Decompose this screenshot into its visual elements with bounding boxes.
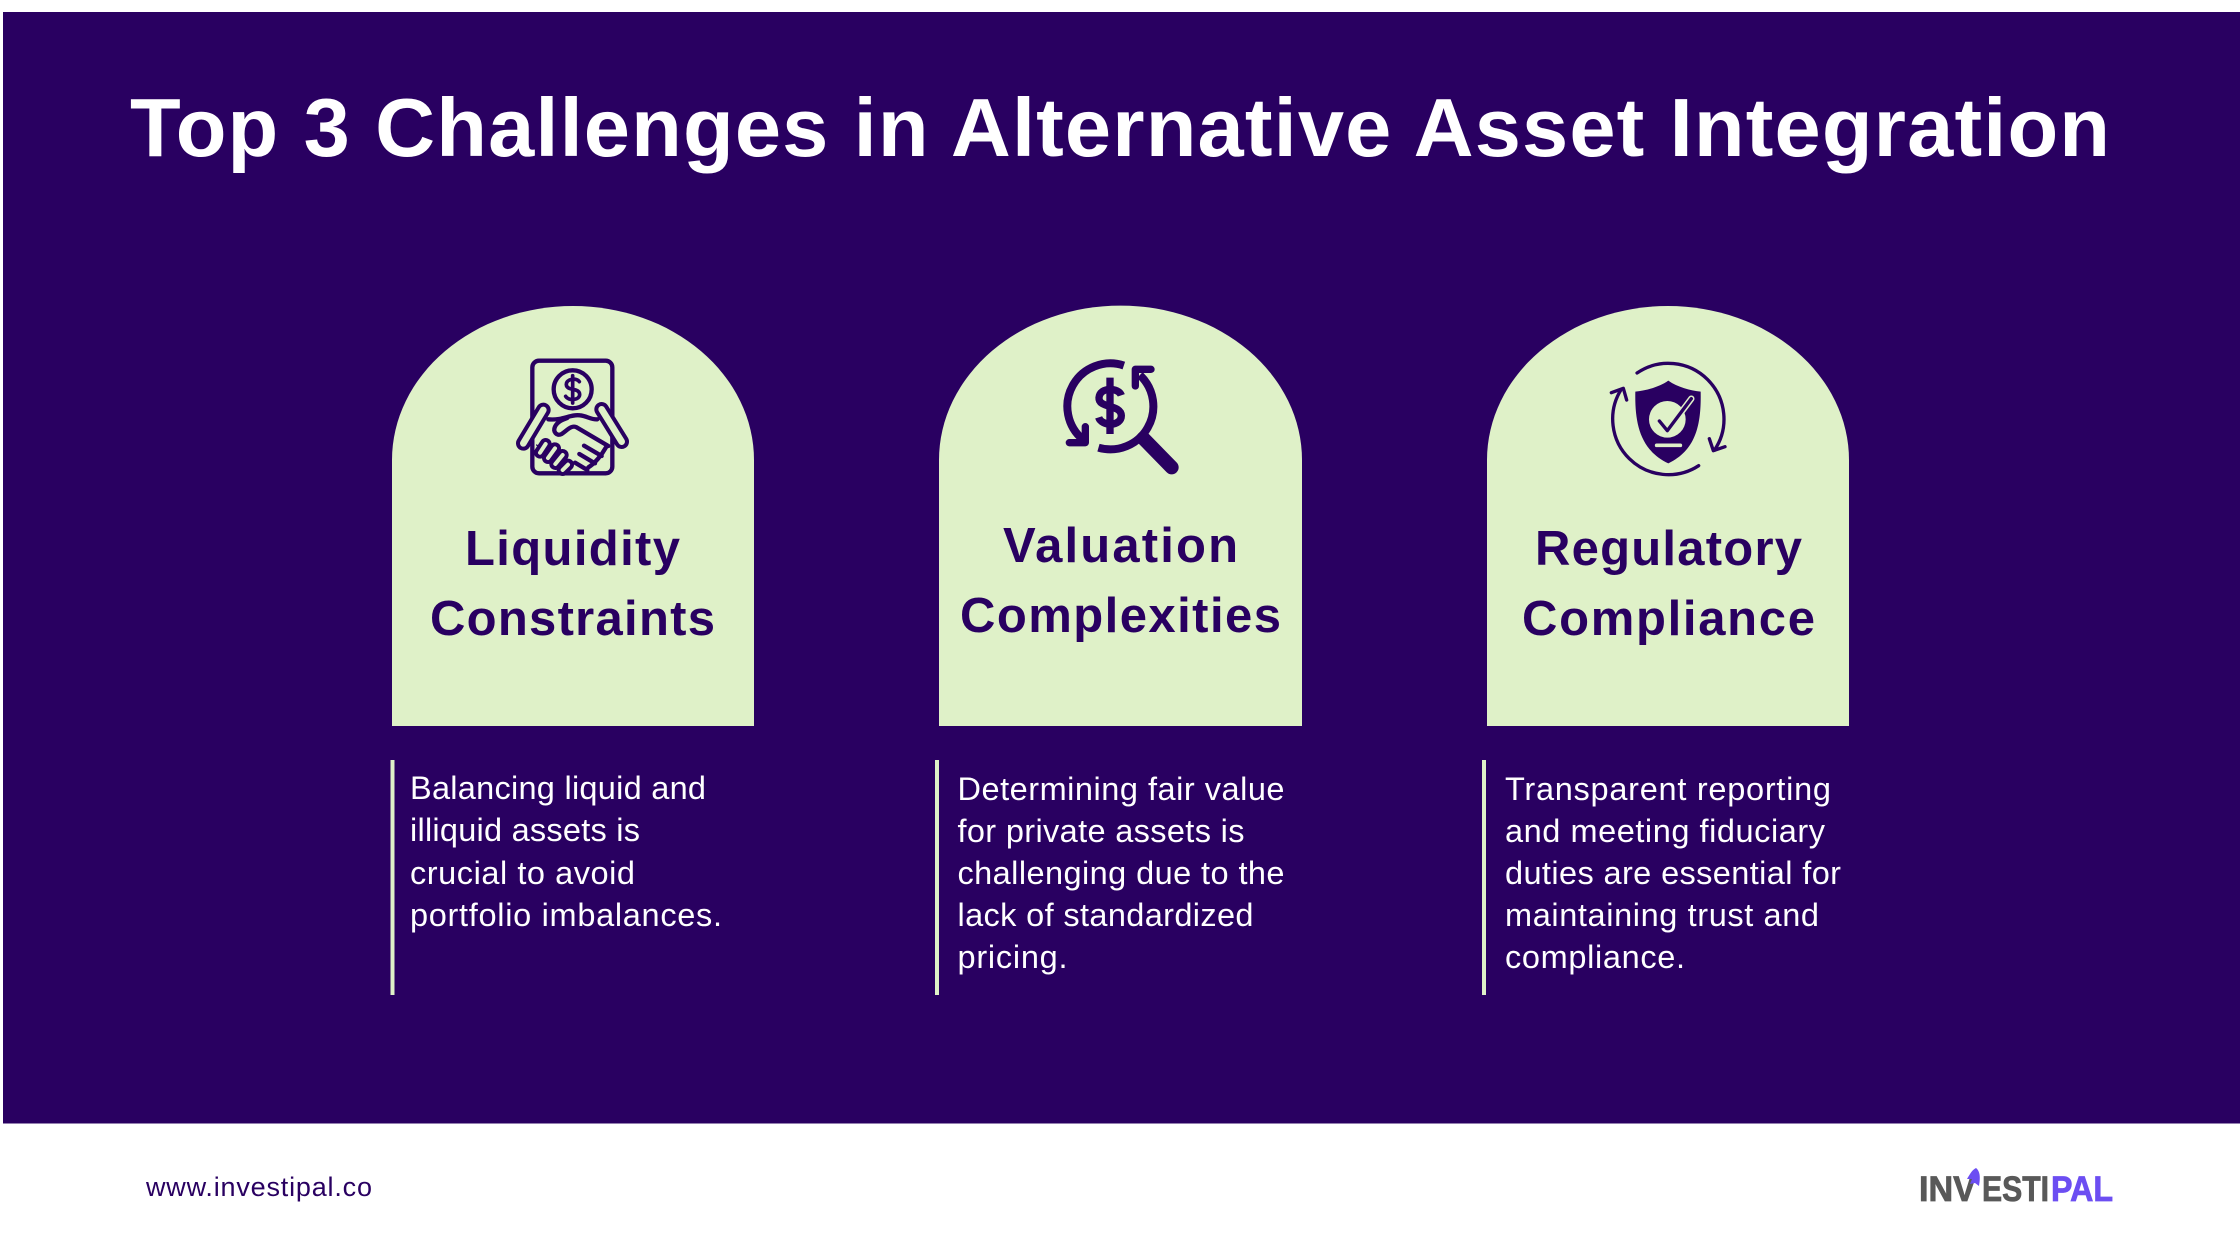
text block: regulatory description: maintaining trust and xyxy=(1505,897,1819,933)
text block: valuation description: Determining fair value xyxy=(958,771,1284,807)
text block: valuation description: for private assets is xyxy=(958,813,1244,849)
text block: valuation description: pricing. xyxy=(958,939,1068,975)
text block: regulatory description: and meeting fiduciary xyxy=(1505,813,1826,849)
text block: valuation description xyxy=(935,760,1284,995)
text block: regulatory description: Transparent reporting xyxy=(1505,771,1831,807)
panel: regulatory compliance xyxy=(1487,306,1849,726)
heading xyxy=(1522,522,1815,646)
text block: liquidity description: illiquid assets is xyxy=(410,812,640,848)
logo: investipal: INV xyxy=(1919,1170,1977,1209)
panel: valuation complexities xyxy=(939,306,1302,726)
heading: Constraints xyxy=(430,592,715,646)
heading: Regulatory xyxy=(1535,522,1802,576)
logo: investipal xyxy=(1919,1168,2113,1209)
heading: Valuation xyxy=(1003,519,1238,573)
heading xyxy=(430,522,715,646)
text block: liquidity description: portfolio imbalances. xyxy=(410,897,722,933)
logo: investipal: ESTI xyxy=(1982,1170,2049,1209)
text block: liquidity description: Balancing liquid and xyxy=(410,770,706,806)
text block: regulatory description: compliance. xyxy=(1505,939,1685,975)
text block: valuation description: lack of standardized xyxy=(958,897,1254,933)
text block: liquidity description: crucial to avoid xyxy=(410,855,635,891)
title: Top 3 Challenges in Alternative Asset Integration xyxy=(130,81,2110,174)
heading: Complexities xyxy=(960,589,1281,643)
panel: liquidity constraints xyxy=(392,306,754,726)
text block: regulatory description: duties are essential for xyxy=(1505,855,1841,891)
heading: Compliance xyxy=(1522,592,1815,646)
text block: regulatory description xyxy=(1482,760,1841,995)
icon: shield with check and circular arrows xyxy=(1611,363,1725,475)
icon: rocket xyxy=(1967,1168,1980,1186)
text block: liquidity description xyxy=(390,760,722,995)
heading xyxy=(960,519,1281,643)
icon: dollar under magnifier with arrows xyxy=(1067,363,1172,467)
icon: handshake over dollar document xyxy=(523,361,622,473)
text block: valuation description: challenging due to the xyxy=(958,855,1284,891)
footer url: www.investipal.co xyxy=(145,1172,372,1202)
heading: Liquidity xyxy=(465,522,680,576)
logo: investipal: PAL xyxy=(2051,1170,2113,1209)
